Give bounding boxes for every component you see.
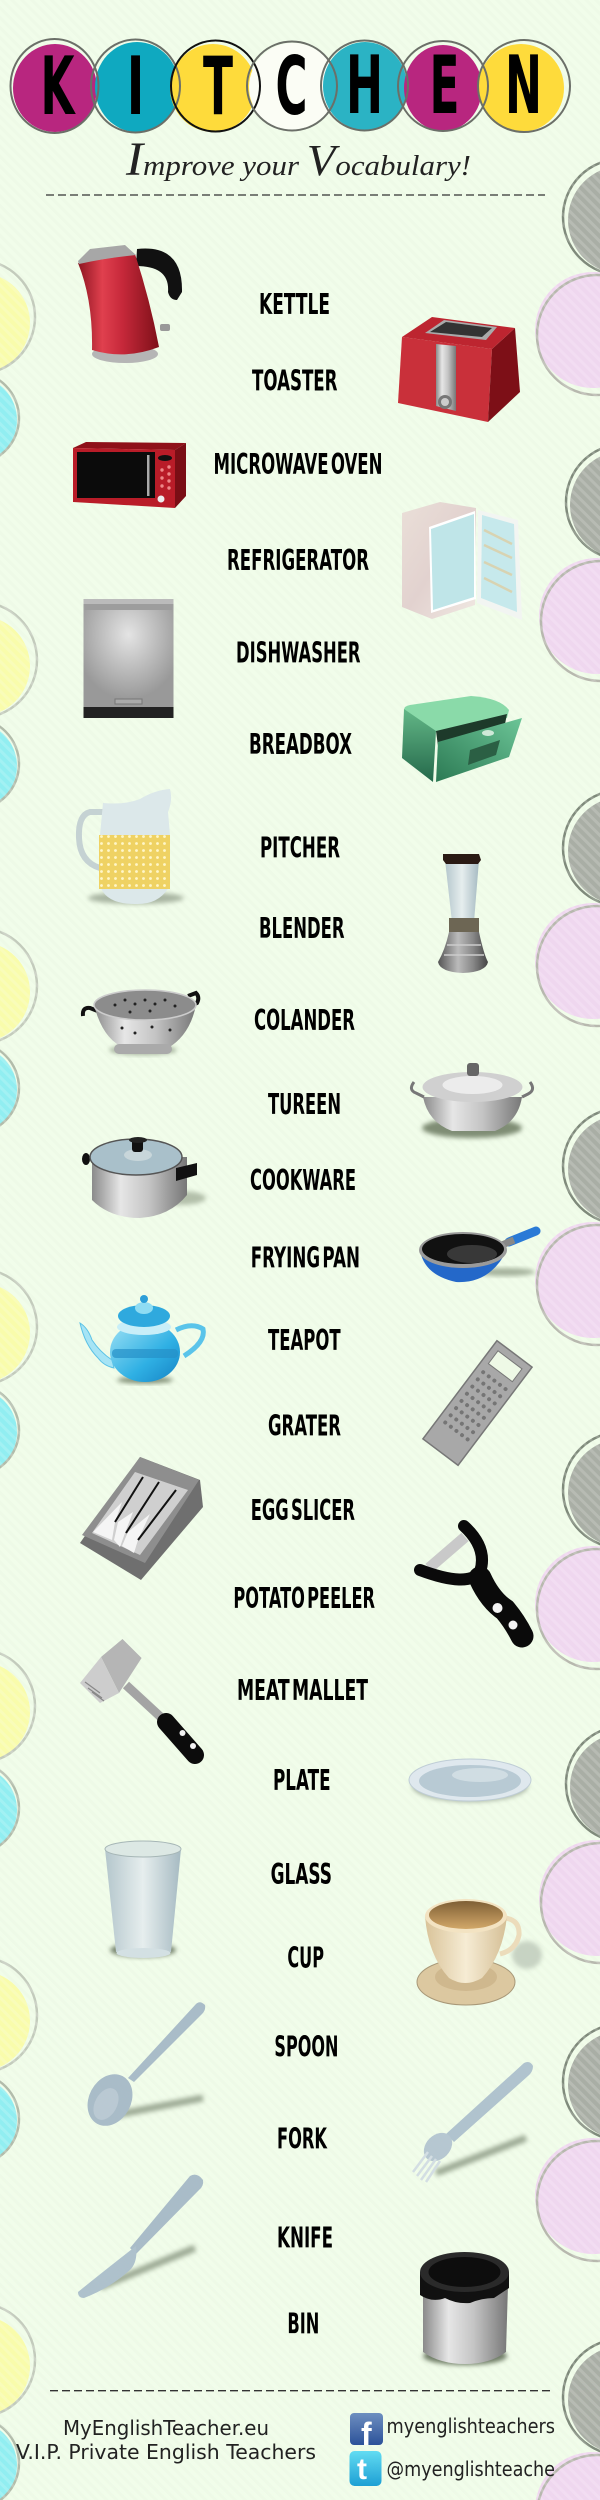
footer: website text: MyEnglishTeacher.eu (63, 2416, 269, 2440)
icon: grater (423, 1341, 532, 1465)
icon: fork (413, 2062, 533, 2182)
title: KITCHEN in circles: C (276, 40, 308, 133)
label: frying pan: FRYING PAN (251, 1241, 360, 1274)
icon: blender (438, 854, 488, 973)
label: teapot: TEAPOT (268, 1324, 341, 1357)
footer: twitter (350, 2451, 555, 2486)
label: egg slicer: EGG SLICER (251, 1494, 355, 1527)
icon: breadbox (402, 696, 522, 782)
footer: facebook (350, 2413, 555, 2452)
bottom dashed divider (50, 2390, 550, 2392)
label: bin: BIN (287, 2307, 319, 2340)
label: toaster: TOASTER (252, 365, 338, 398)
icon: egg slicer (80, 1457, 203, 1580)
icon: tureen (411, 1063, 533, 1138)
label: dishwasher: DISHWASHER (236, 637, 361, 670)
icon: meat mallet (80, 1639, 196, 1755)
label: pitcher: PITCHER (260, 831, 340, 864)
title: KITCHEN in circles (10, 39, 570, 133)
icon: kettle (78, 245, 182, 363)
footer: twitter: t (357, 2453, 367, 2486)
right decorative circles (535, 159, 600, 2500)
title: KITCHEN in circles: T (203, 40, 233, 133)
label: knife: KNIFE (277, 2221, 333, 2254)
icon: potato peeler (420, 1526, 522, 1636)
icon: frying pan (419, 1231, 536, 1282)
icon: teapot (80, 1295, 203, 1384)
label: glass: GLASS (271, 1858, 332, 1891)
icon: knife (78, 2175, 203, 2298)
footer: facebook: myenglishteachers (386, 2414, 555, 2438)
left decorative circles (0, 260, 37, 2500)
icon: spoon (79, 2002, 205, 2134)
label: spoon: SPOON (274, 2031, 338, 2064)
icon: cup (417, 1899, 542, 2005)
icon: cookware (82, 1137, 206, 1218)
label: meat mallet: MEAT MALLET (237, 1674, 368, 1707)
icon: refrigerator (402, 502, 522, 620)
icon: toaster (398, 317, 520, 422)
footer: twitter: @myenglishteache (386, 2457, 555, 2481)
label: breadbox: BREADBOX (249, 728, 352, 761)
label: tureen: TUREEN (268, 1088, 341, 1121)
icon: bin (420, 2252, 509, 2365)
icon: plate (409, 1759, 531, 1802)
label: potato peeler: POTATO PEELER (233, 1582, 375, 1615)
footer: website text: V.I.P. Private English Teachers (16, 2440, 316, 2464)
icon: glass (105, 1841, 181, 1958)
label: cup: CUP (287, 1941, 324, 1974)
footer: facebook: f (361, 2416, 372, 2452)
label: refrigerator: REFRIGERATOR (227, 544, 369, 577)
title: KITCHEN in circles: E (430, 39, 460, 132)
label: colander: COLANDER (254, 1004, 355, 1037)
top dashed divider (46, 194, 545, 196)
icon: microwave oven (73, 442, 186, 508)
title: KITCHEN in circles: K (40, 40, 76, 133)
footer: website text (16, 2416, 316, 2464)
label: fork: FORK (277, 2122, 328, 2155)
title: KITCHEN in circles: H (346, 39, 383, 132)
subtitle: Improve your Vocabulary! (125, 133, 471, 186)
label: kettle: KETTLE (259, 288, 330, 321)
title: KITCHEN in circles: N (505, 39, 542, 132)
label: microwave oven: MICROWAVE OVEN (214, 448, 382, 481)
label: blender: BLENDER (259, 912, 345, 945)
icon: dishwasher (84, 599, 174, 718)
label: cookware: COOKWARE (250, 1164, 356, 1197)
title: KITCHEN in circles: I (127, 40, 144, 133)
icon: pitcher (79, 789, 184, 904)
icon: colander (83, 990, 198, 1055)
label: plate: PLATE (273, 1764, 331, 1797)
label: grater: GRATER (268, 1409, 341, 1442)
